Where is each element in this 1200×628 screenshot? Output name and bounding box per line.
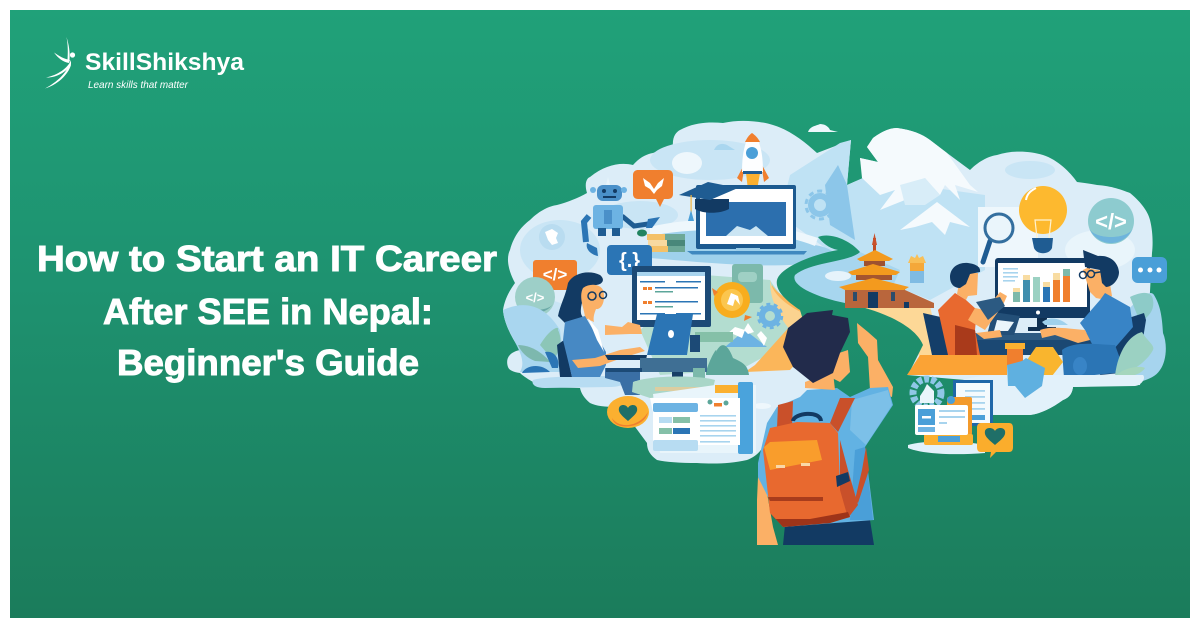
arms: [572, 347, 645, 368]
chairs: [923, 313, 1146, 375]
temple: [839, 233, 934, 308]
icon: heart chat bubble: [977, 423, 1013, 458]
icon: graduation cap: [679, 182, 738, 221]
front card: [915, 405, 968, 435]
bar chart: [1013, 269, 1070, 302]
jacket: [563, 316, 606, 377]
backpack handle: [793, 414, 821, 421]
cup: [1005, 343, 1025, 365]
small pagoda: [908, 254, 926, 283]
woman at desk: [557, 272, 733, 395]
icon: globe: [539, 224, 565, 250]
icon: gear in mountains: [806, 191, 834, 219]
hair: [558, 272, 603, 324]
monitor with code: [632, 266, 711, 327]
side band: [836, 472, 850, 487]
title: Beginner's Guide: [117, 342, 419, 383]
icon: teal card: [732, 264, 763, 303]
orange table: [907, 355, 1007, 375]
leaves: left: [503, 305, 625, 388]
icon: chat dots: [1132, 257, 1167, 283]
icon: rocket: [737, 133, 769, 202]
desk: [640, 358, 707, 372]
books: [637, 230, 685, 252]
icon: small mountains: [725, 323, 767, 347]
icon: code circle: </>: [1095, 209, 1127, 234]
hair: [783, 310, 850, 383]
title: [37, 238, 497, 383]
illustration: [503, 121, 1167, 545]
raised arm: [857, 323, 893, 397]
icon: orange chat bubble: [633, 170, 673, 207]
tan path: [745, 285, 808, 372]
tree: [706, 345, 749, 375]
page behind bulb: [978, 207, 1038, 267]
icon: blue braces badge: {.}: [619, 250, 640, 272]
title: How to Start an IT Career: [37, 238, 497, 279]
icon: gold coin badge: [712, 282, 752, 321]
gear and documents: [908, 379, 993, 454]
form card: [653, 403, 698, 451]
winding road: [777, 235, 923, 410]
icon: teal code circle: [515, 277, 555, 317]
pale water: [650, 226, 835, 265]
monitor with bar chart: [995, 258, 1090, 331]
robot: [584, 177, 660, 256]
shirt: [758, 387, 893, 527]
leaves: right back: [1115, 293, 1166, 382]
icon: magnifier: [983, 214, 1013, 262]
icon: heart coin: [607, 396, 649, 428]
chair: [557, 340, 572, 377]
buckles: [776, 465, 785, 468]
cloud tint patches: [513, 140, 1135, 350]
icon: teal code circle: </>: [526, 290, 545, 305]
small clouds: [672, 124, 838, 409]
neck: [805, 372, 835, 390]
icon: light bulb: [1019, 186, 1067, 253]
icon: code circle: [1088, 198, 1134, 244]
icon: folded map: [1007, 358, 1045, 398]
icon: gear: [758, 304, 782, 328]
brand name: SkillShikshya: [85, 49, 244, 76]
backpack body: [763, 422, 850, 527]
backpack pocket: [764, 440, 822, 470]
title: After SEE in Nepal:: [103, 291, 433, 332]
document stack: [632, 376, 756, 454]
icon: orange code tag: </>: [543, 265, 567, 284]
laptop with keyboard screen: [687, 185, 807, 254]
icon: blue braces badge: [607, 245, 652, 275]
cloud backdrop: [503, 121, 1153, 464]
face: [581, 285, 604, 322]
glasses: [588, 292, 606, 300]
man in orange shirt: [938, 263, 1007, 355]
leaves: right front: [1115, 332, 1153, 377]
laptop: [647, 314, 693, 355]
icon: gold hexagon: [1027, 347, 1063, 376]
boy with backpack: [757, 310, 893, 545]
back page: [953, 380, 993, 426]
left arm: [757, 477, 778, 545]
pants: [605, 368, 640, 395]
shoulder straps: [777, 401, 793, 428]
tagline: Learn skills that matter: [88, 79, 188, 91]
logo: [45, 37, 244, 91]
man in blue shirt: [1040, 250, 1133, 378]
icon: orange code tag: [533, 260, 577, 290]
mint ground: [640, 275, 800, 375]
mountains: [780, 128, 985, 300]
icon: leaping figure: [45, 37, 75, 88]
desk and tablet: [972, 312, 1095, 355]
ear: [832, 350, 850, 382]
pale cloud base: [963, 375, 1144, 415]
pants: [783, 520, 874, 545]
